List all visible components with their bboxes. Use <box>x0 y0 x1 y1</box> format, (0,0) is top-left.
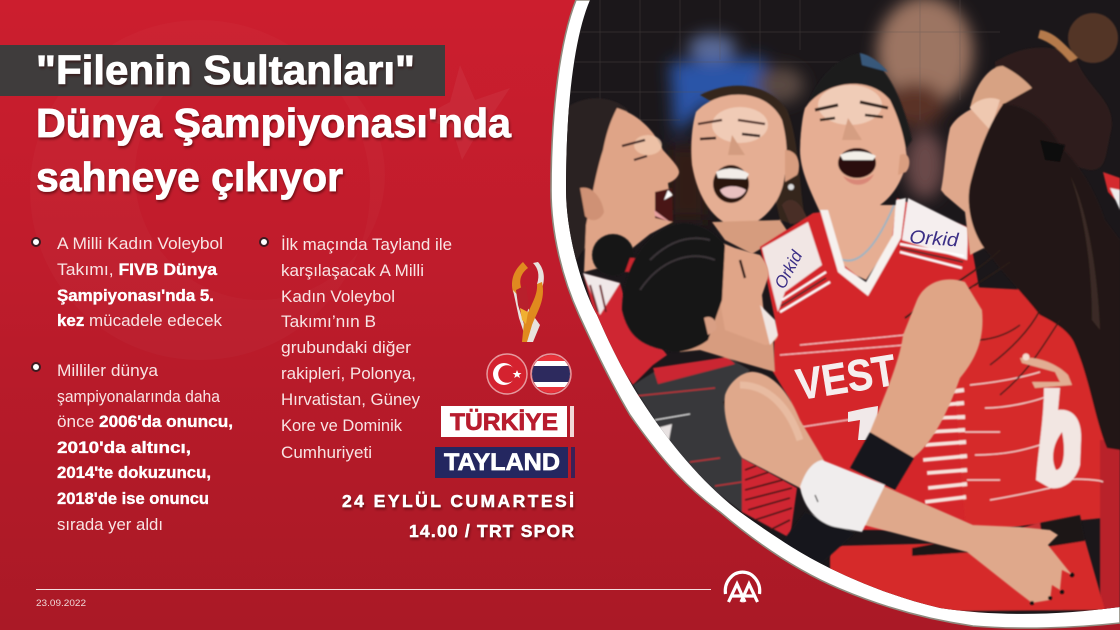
player: foreground with bun <box>592 223 797 538</box>
foreground arm with wrap and hand <box>724 279 1074 605</box>
crowd background <box>668 0 973 220</box>
shorts and belt <box>830 515 1105 612</box>
right head <box>940 103 1004 256</box>
team label: Tayland: TAYLAND <box>444 449 560 476</box>
paragraph 2: 2018'de ise onuncu <box>57 490 209 508</box>
paragraph 2: sırada yer aldı <box>57 516 163 534</box>
footer rule <box>36 589 711 590</box>
match time and channel: 14.00 / TRT SPOR <box>409 521 574 541</box>
paragraph 3: Cumhuriyeti <box>281 444 372 462</box>
paragraph 2 <box>57 362 233 534</box>
paragraph 1: Şampiyonası'nda 5. <box>57 287 214 305</box>
paragraph 1: A Milli Kadın Voleybol <box>57 235 223 253</box>
player: right, long hair and jersey <box>905 98 1120 610</box>
date: 23.09.2022 <box>36 598 86 609</box>
net <box>570 0 1000 130</box>
paragraph 2: 2014'te dokuzuncu, <box>57 464 211 482</box>
paragraph 3: Hırvatistan, Güney <box>281 391 421 409</box>
lettering on main jersey: Orkid <box>909 227 961 252</box>
icon: Thai flag <box>530 354 572 396</box>
photo: volleyball players celebrating <box>540 0 1120 630</box>
team label: Tayland <box>435 447 575 478</box>
photo frame: white arc <box>551 0 1120 628</box>
side stripes <box>923 390 967 502</box>
bullet marker <box>32 238 40 246</box>
paragraph 3: İlk maçında Tayland ile <box>281 235 452 254</box>
team label: Türkiye: TÜRKİYE <box>450 409 558 436</box>
title <box>36 47 512 200</box>
paragraph 1: kez mücadele edecek <box>57 312 223 330</box>
bullet column 1 <box>32 235 233 534</box>
paragraph 1 <box>57 235 223 330</box>
paragraph 2: şampiyonalarında daha <box>57 388 221 406</box>
paragraph 3: Takımı’nın B <box>281 313 376 331</box>
ear <box>580 188 604 220</box>
bullet marker <box>32 363 40 371</box>
team label: Türkiye <box>441 406 574 437</box>
player: left <box>566 98 679 385</box>
icon: Turkish flag <box>487 354 527 394</box>
bullet column 2 <box>260 235 452 462</box>
paragraph 3: Kadın Voleybol <box>281 288 395 306</box>
paragraph 3: Kore ve Dominik <box>281 417 403 435</box>
player: top right <box>970 13 1120 210</box>
lettering on main jersey <box>771 227 961 440</box>
jersey <box>760 198 985 530</box>
title: sahneye çıkıyor <box>36 154 343 200</box>
upper arm right player <box>870 279 983 458</box>
title: "Filenin Sultanları" <box>36 47 415 93</box>
paragraph 3: karşılaşacak A Milli <box>281 262 424 280</box>
lettering on main jersey: VEST <box>793 346 899 410</box>
paragraph 1: Takımı, FIVB Dünya <box>57 261 218 279</box>
player: centre back <box>691 86 808 254</box>
paragraph 2: önce 2006'da onuncu, <box>57 413 233 431</box>
player: centre main <box>760 53 985 530</box>
heading band <box>0 45 445 96</box>
icon: AA logo <box>725 572 760 602</box>
match date: 24 EYLÜL CUMARTESİ <box>342 491 574 511</box>
fingers <box>1020 358 1072 388</box>
paragraph 2: Milliler dünya <box>57 362 159 380</box>
title: Dünya Şampiyonası'nda <box>36 100 512 146</box>
paragraph 3: rakipleri, Polonya, <box>281 365 416 383</box>
icon: championship ribbon logo <box>512 262 544 342</box>
paragraph 3: grubundaki diğer <box>281 339 412 357</box>
bullet marker <box>260 238 268 246</box>
lettering on main jersey: Orkid <box>771 247 807 292</box>
number 6 <box>1036 388 1081 488</box>
paragraph 3 <box>281 235 452 462</box>
paragraph 2: 2010'da altıncı, <box>57 439 191 457</box>
